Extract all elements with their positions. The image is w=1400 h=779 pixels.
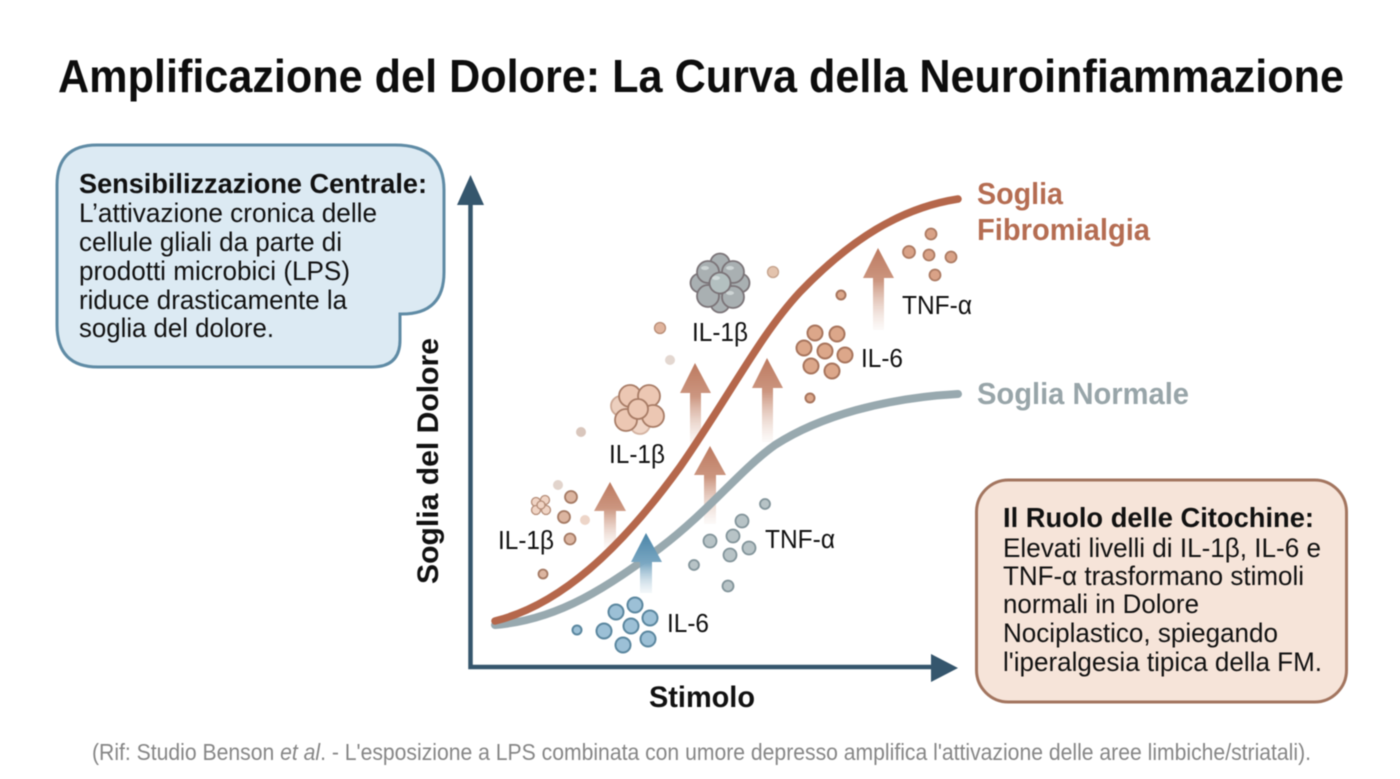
panel: sensibilizzazione centrale: Sensibilizzazione Centrale:	[79, 168, 427, 199]
label: soglia normale: Soglia Normale	[977, 376, 1189, 411]
panel: sensibilizzazione centrale: cellule gliali da parte di	[79, 227, 342, 257]
cluster: small IL-1 beta	[532, 480, 590, 578]
panel: ruolo delle citochine	[976, 480, 1346, 702]
panel: ruolo delle citochine: Nociplastico, spiegando	[1003, 618, 1278, 648]
panel: sensibilizzazione centrale: soglia del dolore.	[79, 313, 274, 343]
panel: ruolo delle citochine: Il Ruolo delle Citochine:	[1003, 502, 1314, 533]
arrows: rust, behind curves	[594, 248, 894, 548]
panel: sensibilizzazione centrale: prodotti microbici (LPS)	[79, 256, 350, 286]
label: IL-6 rust: IL-6	[861, 345, 903, 373]
panel: ruolo delle citochine: Elevati livelli di IL-1β, IL-6 e	[1003, 533, 1321, 563]
label: IL-1 beta large: IL-1β	[692, 319, 748, 347]
label: IL-6 blue: IL-6	[667, 610, 709, 638]
panel: ruolo delle citochine: l'iperalgesia tipica della FM.	[1003, 647, 1322, 677]
cluster: large IL-1 beta gray	[690, 254, 778, 312]
footnote: (Rif: Studio Benson et al. - L'esposizione a LPS combinata con umore depresso amplifica l'attivazione delle aree limbiche/striatali).	[92, 739, 1311, 765]
cluster: IL-6 rust	[796, 290, 852, 402]
curve: soglia normale	[495, 394, 958, 625]
curve: soglia fibromialgia	[495, 199, 958, 621]
label: soglia fibromialgia: Soglia	[977, 176, 1064, 211]
panel: ruolo delle citochine: normali in Dolore	[1003, 589, 1199, 619]
arrow: blue	[631, 533, 662, 593]
label: TNF-alpha gray: TNF-α	[765, 526, 835, 554]
panel: sensibilizzazione centrale	[57, 145, 444, 367]
label: soglia fibromialgia: Fibromialgia	[977, 212, 1151, 247]
label: IL-1 beta small: IL-1β	[498, 527, 554, 555]
x axis label: Stimolo	[649, 681, 755, 714]
chart axes	[457, 175, 958, 682]
y axis label: Soglia del Dolore	[412, 338, 445, 584]
panel: sensibilizzazione centrale: riduce drasticamente la	[79, 285, 347, 315]
cluster: IL-6 blue	[572, 598, 658, 652]
cluster: medium IL-1 beta	[576, 322, 675, 437]
panel: ruolo delle citochine: TNF-α trasformano stimoli	[1003, 561, 1304, 591]
label: soglia fibromialgia	[977, 176, 1151, 247]
label: TNF-alpha rust: TNF-α	[902, 292, 972, 320]
panel: sensibilizzazione centrale: L’attivazione cronica delle	[79, 198, 377, 228]
cluster: TNF-alpha gray	[689, 499, 770, 592]
label: IL-1 beta medium: IL-1β	[609, 441, 665, 469]
cluster: TNF-alpha rust	[903, 228, 956, 280]
title: Amplificazione del Dolore: La Curva della Neuroinfiammazione	[58, 50, 1344, 102]
